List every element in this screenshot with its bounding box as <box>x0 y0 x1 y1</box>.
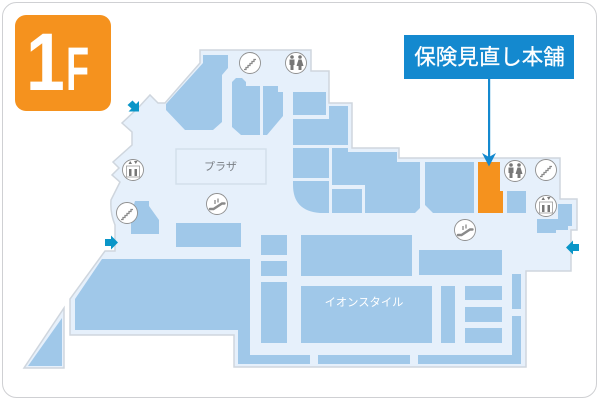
plaza <box>176 149 266 184</box>
entrance arrow: north-west <box>128 100 139 112</box>
icon: restroom east <box>504 160 526 182</box>
icon: stairs west <box>116 202 138 224</box>
callout: shop label <box>404 35 574 79</box>
plaza: プラザ <box>204 160 237 173</box>
arrow: label to shop <box>482 79 496 166</box>
icon: escalator east <box>454 220 476 240</box>
entrance arrow: west <box>105 236 118 250</box>
floor badge: 1F: 1 <box>26 17 65 108</box>
anchor store: イオンスタイル <box>301 286 432 343</box>
floor badge: 1F: F <box>66 35 89 103</box>
shop blocks <box>28 55 572 366</box>
icon: stairs east <box>536 160 556 180</box>
floor plan outline: main building <box>70 50 577 367</box>
callout: shop label: 保険見直し本舗 <box>414 46 565 70</box>
entrance arrow: east <box>566 240 579 254</box>
icon: stairs north <box>240 52 260 74</box>
floor plan outline: south-west triangle <box>24 308 64 368</box>
floor badge: 1F <box>15 15 111 111</box>
anchor store: イオンスタイル: イオンスタイル <box>325 296 403 309</box>
icon: elevator east <box>536 196 556 216</box>
highlighted shop <box>478 162 503 213</box>
icon: elevator west <box>122 160 144 180</box>
icon: restroom north <box>286 52 306 74</box>
icon: escalator plaza <box>206 194 228 214</box>
